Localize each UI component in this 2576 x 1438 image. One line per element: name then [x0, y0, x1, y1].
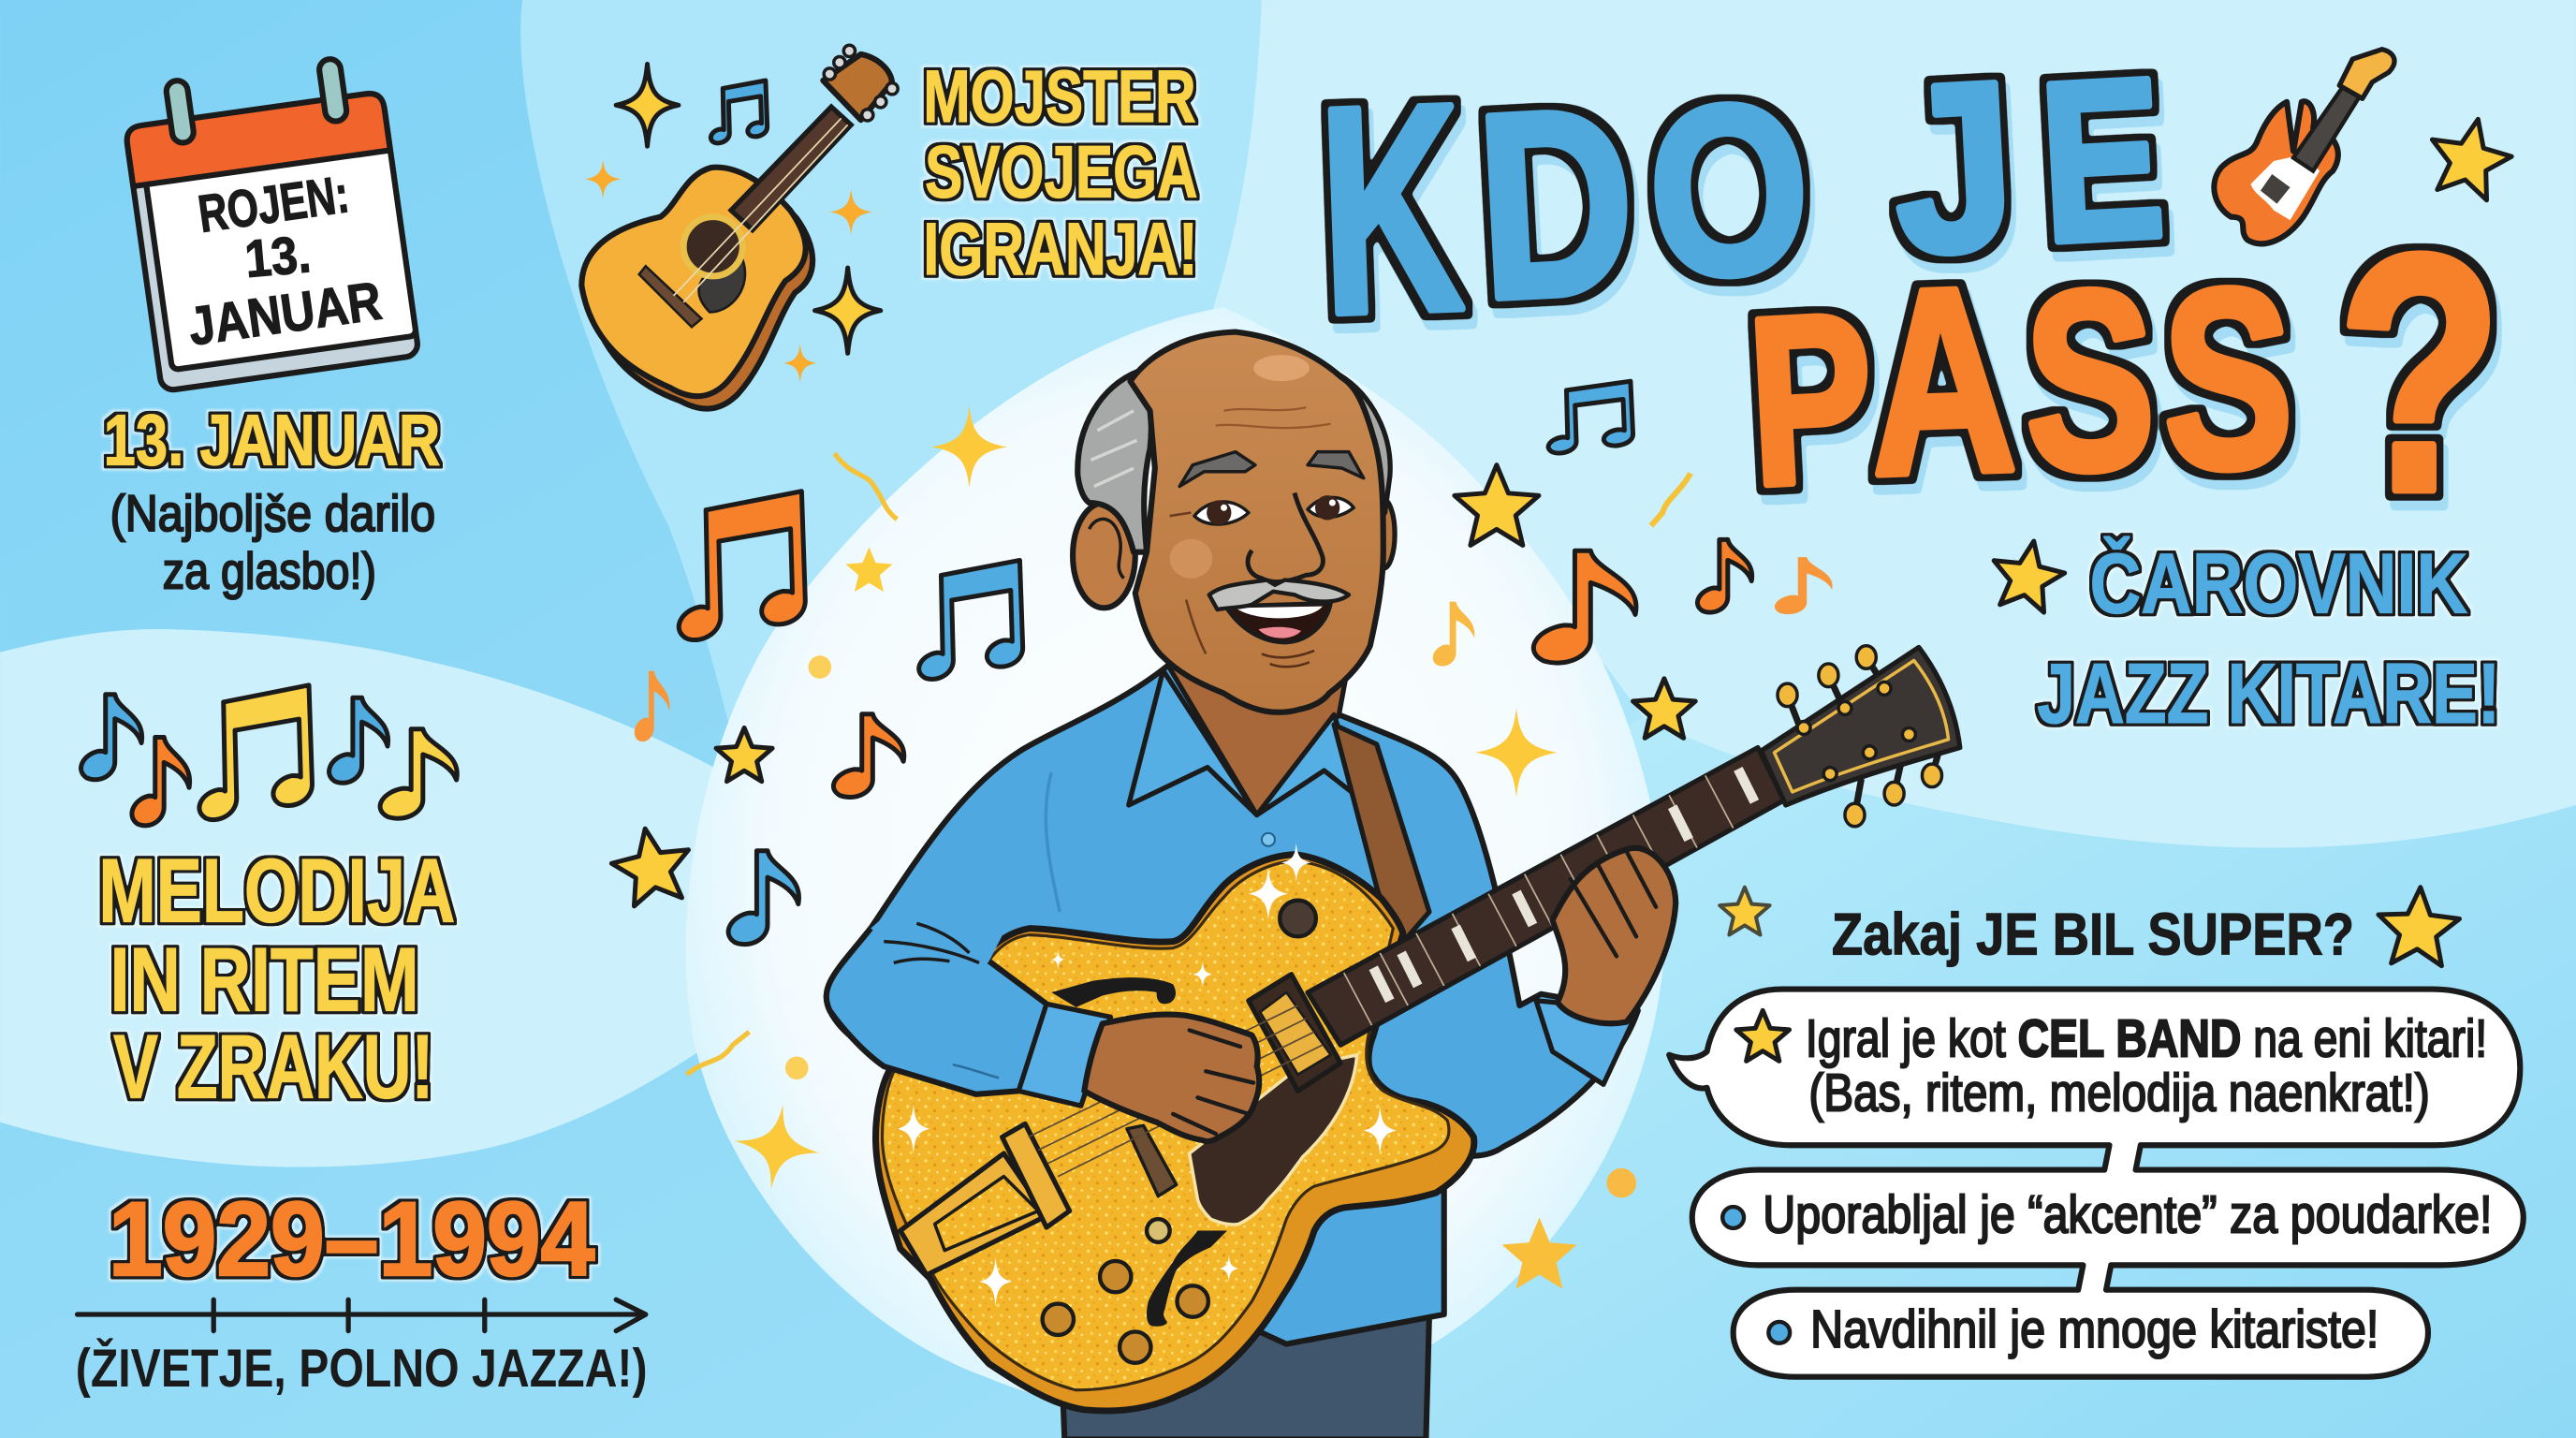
title: K [1315, 43, 1467, 376]
cheek lines [1170, 513, 1206, 654]
icon: big star [2376, 886, 2461, 967]
eyes [1194, 495, 1354, 525]
guitar strap [1334, 725, 1429, 949]
title: E [2035, 31, 2169, 290]
panel: melody and rhythm [81, 685, 457, 1117]
neck skin [1168, 666, 1347, 814]
illustration: Joe Pass with guitar [827, 332, 1960, 1438]
collar [1129, 670, 1362, 814]
heading: Zakaj JE BIL SUPER? [1832, 902, 2354, 968]
teeth [1236, 607, 1323, 618]
cuff [1018, 1004, 1110, 1106]
title: J [1887, 33, 2021, 304]
text: melody and rhythm in the air: IN RITEM [110, 930, 419, 1030]
icon: small star [1720, 888, 1770, 935]
subtitle: wizard of jazz guitar: ČAROVNIK [2089, 536, 2467, 632]
floating notes and stars [607, 381, 1833, 1289]
nose [1248, 493, 1323, 582]
date heading: 13. JANUAR [104, 401, 440, 481]
panel: why he was super [1669, 886, 2524, 1377]
bullet: inspired guitarists: Navdihnil je mnoge kitariste! [1810, 1299, 2378, 1358]
calendar text: 13. [242, 224, 313, 288]
shirt shading and cuff [1046, 772, 1638, 1084]
ear [1073, 503, 1135, 608]
date caption [110, 485, 435, 599]
face [1131, 332, 1383, 712]
forearm sleeve over guitar [827, 871, 1046, 1094]
title: ? [2337, 185, 2502, 562]
title: P [1743, 263, 1879, 536]
trousers [1060, 1314, 1429, 1438]
chin lines [1262, 651, 1314, 667]
text: master of his playing: MOJSTER [923, 55, 1196, 138]
title: S [2160, 236, 2295, 522]
text: master of his playing: IGRANJA! [923, 208, 1197, 290]
left hand on fretboard [1553, 848, 1676, 1023]
guitar body side [875, 855, 1474, 1411]
speech bubble stack [1669, 990, 2524, 1377]
title [1315, 31, 2502, 562]
title: S [2023, 238, 2157, 524]
pickguard [1190, 1055, 1357, 1225]
bullet: whole band: (Bas, ritem, melodija naenkrat!) [1808, 1063, 2430, 1122]
text: master of his playing [923, 55, 1197, 290]
icon: row of notes [81, 685, 457, 826]
grey hair [1077, 372, 1151, 552]
grey hair right [1339, 374, 1390, 522]
guitar body top [883, 861, 1449, 1390]
calendar text: JANUAR [185, 271, 386, 358]
forehead wrinkles [1216, 407, 1331, 428]
text: melody and rhythm in the air [98, 842, 455, 1117]
mouth [1225, 603, 1331, 642]
knobs [1043, 901, 1316, 1363]
right ear [1372, 500, 1395, 568]
cheek [1170, 539, 1212, 579]
hand on strings [1084, 1014, 1259, 1141]
tailpiece and bridge [900, 1005, 1323, 1275]
text: master of his playing: SVOJEGA [925, 131, 1197, 213]
icon: electric guitar [2214, 50, 2394, 243]
icon: acoustic guitar [581, 45, 898, 409]
calendar text [185, 164, 386, 358]
neck [1308, 748, 1784, 1045]
bullet: whole band: Igral je kot CEL BAND na eni kitari! [1806, 1008, 2487, 1067]
pickup [1249, 975, 1340, 1091]
panel: birth date [104, 52, 440, 599]
date caption: (Najboljše darilo [110, 485, 435, 542]
calendar text: ROJEN: [195, 164, 353, 243]
tongue [1258, 627, 1301, 638]
glitter sparkles [897, 843, 1397, 1306]
subtitle: wizard of jazz guitar [1986, 535, 2500, 741]
panel: lifespan timeline [76, 1180, 648, 1399]
bullet: whole band [1736, 1008, 2487, 1122]
title: O [1643, 53, 1815, 329]
panel: master of playing [581, 45, 1197, 409]
date caption: za glasbo!) [163, 542, 376, 599]
headstock [1761, 646, 1960, 827]
left hand finger lines [1571, 851, 1656, 956]
head highlight [1253, 355, 1310, 381]
hand finger lines [1173, 1030, 1253, 1134]
head [1073, 332, 1395, 712]
years: 1929–1994 [109, 1180, 594, 1298]
caption: (ŽIVETJE, POLNO JAZZA!) [76, 1338, 648, 1399]
icon: sparkles and note [585, 64, 881, 383]
text: melody and rhythm in the air: MELODIJA [98, 842, 455, 942]
moustache [1209, 580, 1349, 609]
icon: star top right [2422, 110, 2518, 203]
title: D [1471, 53, 1641, 355]
title: A [1865, 231, 2019, 530]
shirt [827, 666, 1638, 1344]
icon: calendar [120, 52, 419, 391]
frets and inlays [1344, 769, 1754, 1025]
f-holes [1051, 977, 1227, 1327]
eyebrows [1179, 452, 1364, 486]
timeline arrow [78, 1299, 646, 1331]
text: melody and rhythm in the air: V ZRAKU! [113, 1017, 433, 1117]
